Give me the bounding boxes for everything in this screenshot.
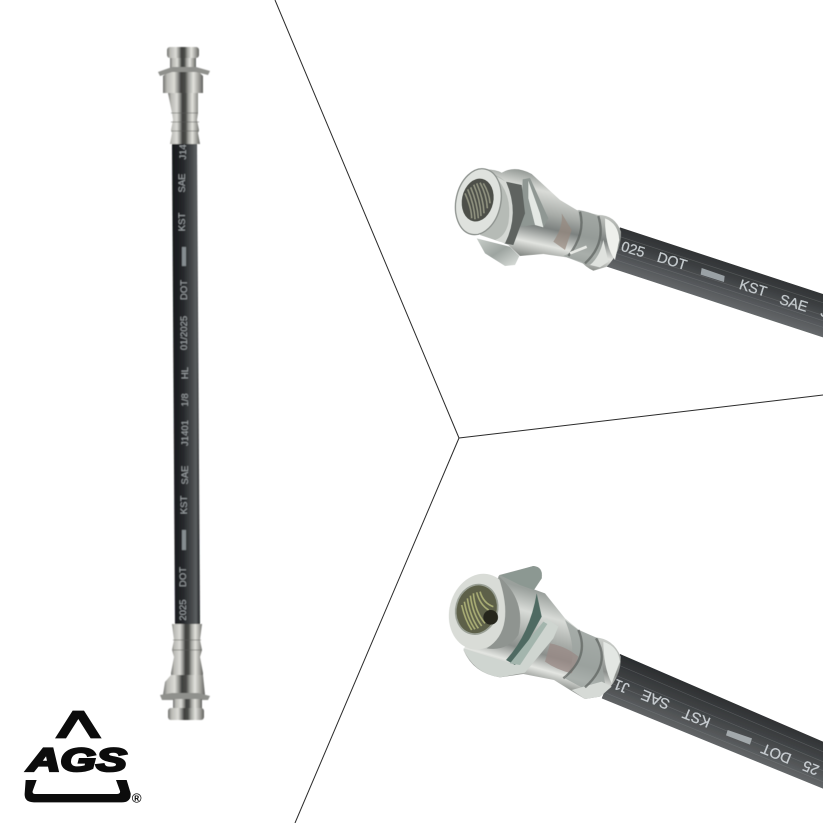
hose body with printed markings: 1/8	[180, 393, 191, 407]
metal fitting	[450, 164, 621, 271]
hose body with printed markings: HL	[180, 367, 191, 379]
hose section with printed markings: DOT	[655, 250, 689, 274]
hose body with printed markings: DOT	[179, 280, 190, 300]
logo triangle base	[25, 780, 131, 802]
hose section with printed markings: 025	[619, 239, 647, 261]
hose body with printed markings	[172, 142, 200, 628]
hose section with printed markings	[602, 654, 823, 789]
hose body with printed markings: J1401	[180, 420, 191, 446]
dividing lines between panels	[275, 0, 823, 823]
AGS logo	[25, 711, 142, 805]
hose section with printed markings	[607, 227, 823, 337]
hose section with printed markings: J1	[612, 675, 632, 696]
registered mark: ®	[132, 790, 142, 805]
hose section with printed markings: KST	[737, 277, 769, 301]
bottom metal fitting	[160, 624, 210, 720]
top metal fitting	[158, 47, 210, 144]
hose section with printed markings: SAE	[777, 292, 810, 316]
logo triangle top	[55, 711, 102, 738]
hose section with printed markings: KST	[681, 704, 713, 730]
hose section with printed markings: SAE	[639, 686, 672, 712]
logo wordmark: AGS	[26, 742, 127, 778]
panel: upper close-up of fitting	[450, 164, 823, 337]
hose body with printed markings: J14	[178, 144, 189, 160]
hose body with printed markings: SAE	[177, 173, 188, 193]
hose body with printed markings: DOT	[178, 567, 189, 587]
hose section with printed markings: 25	[801, 757, 822, 778]
hose body with printed markings: KST	[177, 213, 188, 231]
metal fitting	[440, 566, 621, 699]
panel: lower close-up of fitting	[440, 566, 823, 789]
panel: full hose vertical view	[158, 47, 210, 720]
hose section with printed markings: DOT	[759, 739, 794, 766]
hose body with printed markings: KST	[179, 496, 190, 514]
hose body with printed markings: SAE	[180, 465, 191, 485]
hose body with printed markings: 01/2025	[179, 316, 190, 350]
hose body with printed markings: 2025	[178, 599, 189, 621]
